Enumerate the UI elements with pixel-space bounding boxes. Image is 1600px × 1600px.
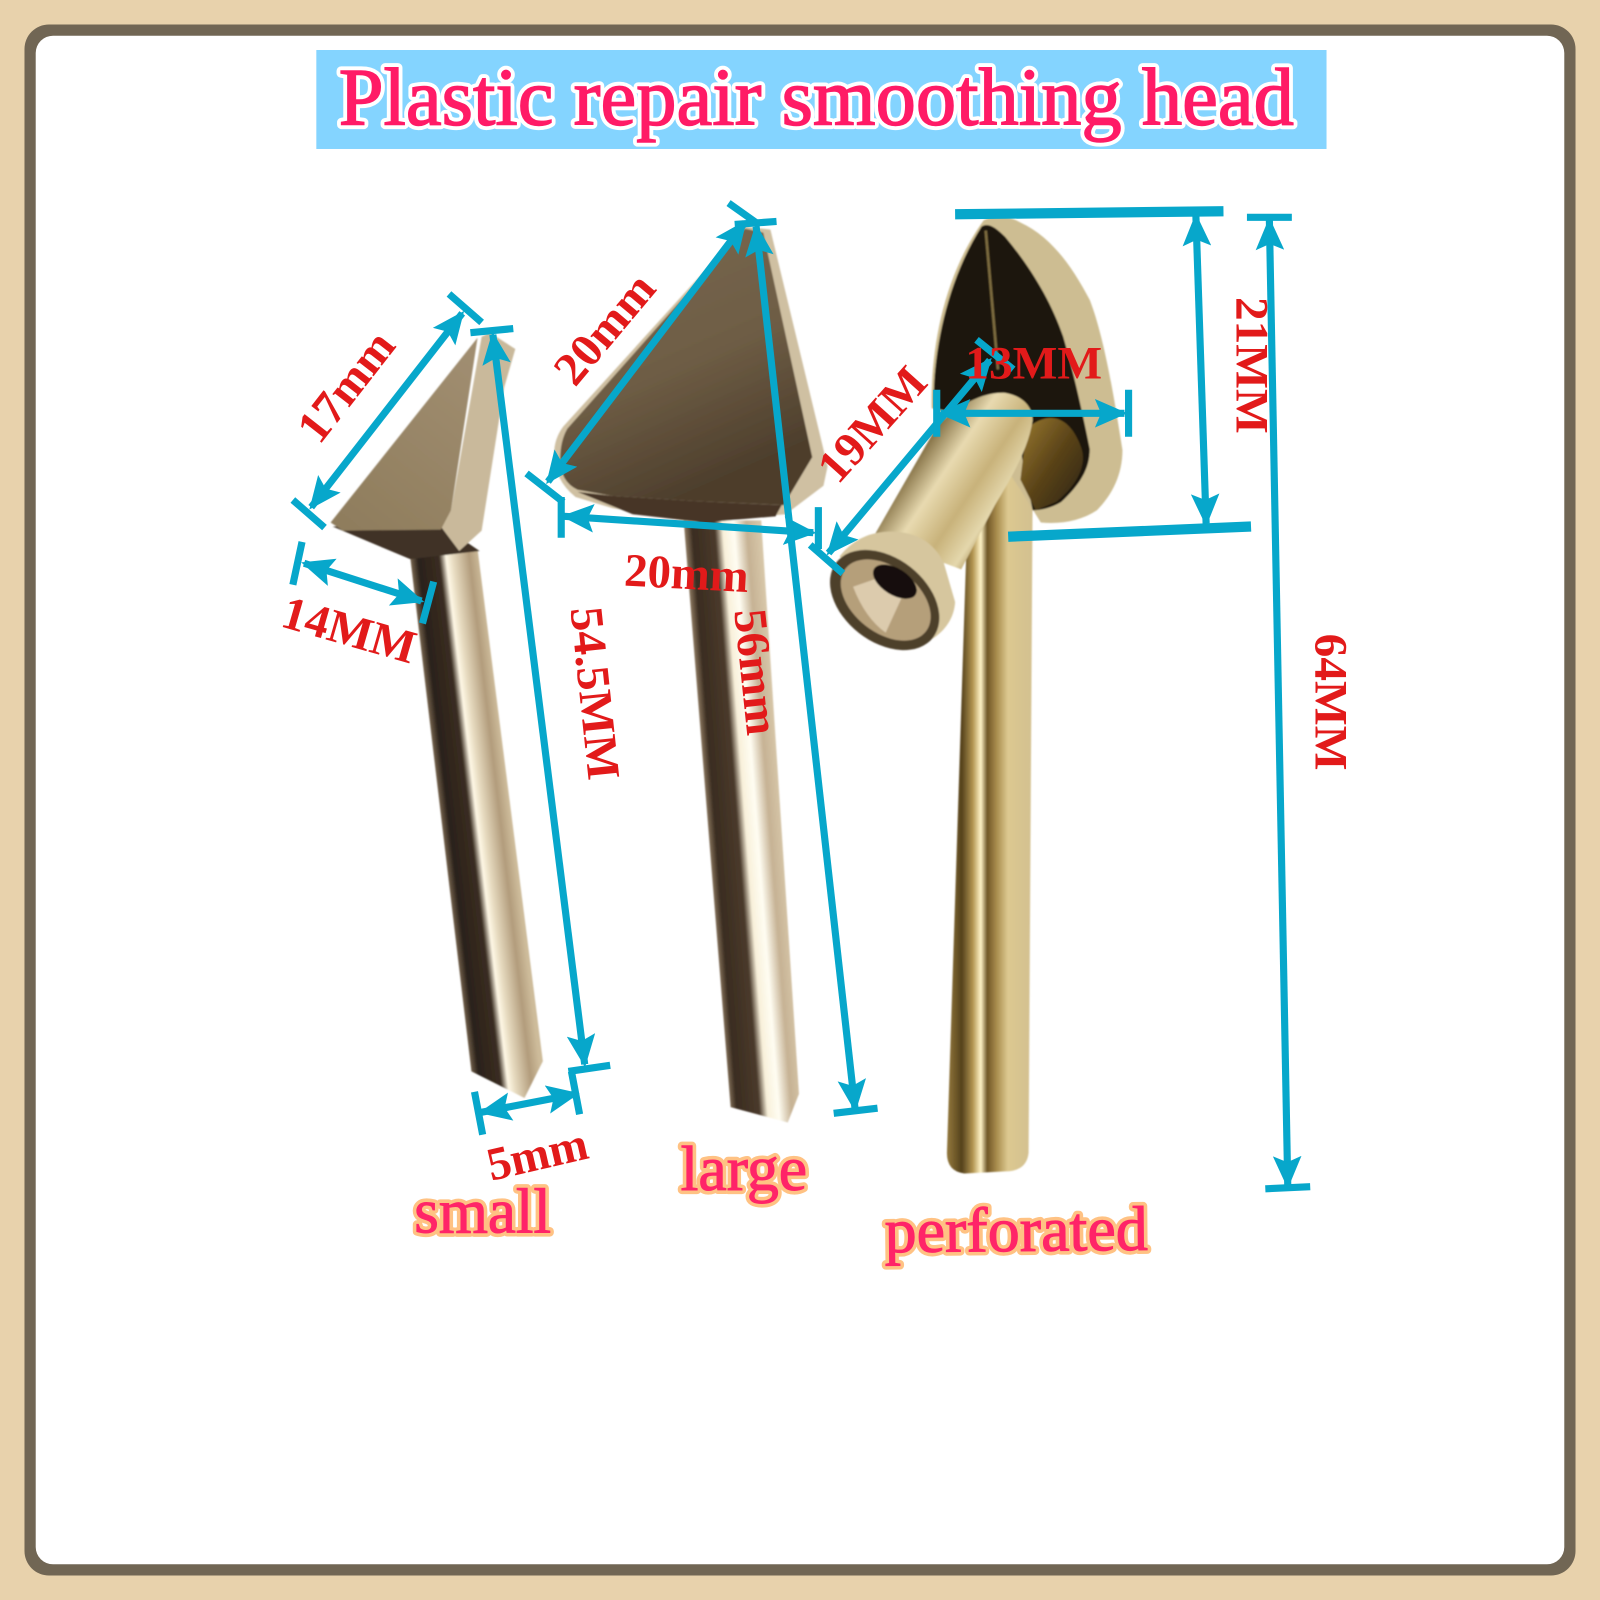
label diagonal 20mm: 20mm [544,263,666,395]
perforated opening [811,529,959,671]
dimension: small 5mm [474,1071,580,1135]
small smoothing head [331,333,543,1098]
large head rim [554,227,828,522]
label 56mm: 56mm [723,606,788,738]
perforated cone [825,543,946,657]
small head flat face [331,338,478,531]
small head underside [333,524,480,559]
perforated head rim [932,217,1122,523]
title banner: Plastic repair smoothing head [339,51,1294,142]
caption small: small [414,1177,551,1247]
large head flat face [560,229,812,505]
caption large: large [681,1134,807,1204]
large head lower shadow [578,492,782,522]
large smoothing head [554,227,828,1122]
dimension: perforated 13MM [937,390,1129,437]
dimension: large diagonal 20mm [527,203,760,502]
title banner: Plastic repair smoothing head [339,51,1294,142]
perforated smoothing head [811,217,1122,1173]
small head shaft [410,549,543,1098]
caption perforated: perforated [884,1194,1148,1266]
perforated cone highlight [853,578,902,633]
label 64MM: 64MM [1304,634,1356,770]
caption perforated: perforated [884,1194,1148,1266]
dimension: small 54.5MM [470,329,610,1071]
perforated hole [867,557,923,606]
label width 20mm: 20mm [623,545,750,603]
dimension: large 56mm [735,221,878,1113]
label 17mm: 17mm [287,321,406,453]
label 13MM: 13MM [965,338,1102,390]
label 21MM: 21MM [1226,297,1278,434]
dimension: small 17mm [293,294,482,528]
caption large: large [681,1134,807,1204]
label 5mm: 5mm [482,1118,593,1192]
dimension: perforated 19MM [810,340,1013,573]
perforated collar [840,532,955,643]
perforated head gold hollow [1020,418,1083,510]
small head side face [441,333,515,551]
perforated head ridge [986,231,998,369]
dimension: perforated 64MM [1247,217,1310,1189]
caption small: small [414,1177,551,1247]
dimension: perforated 21MM [955,211,1251,537]
perforated tube [873,393,1033,569]
label 54.5MM: 54.5MM [560,604,629,782]
dimension: large width 20mm [561,497,818,549]
label 19MM: 19MM [807,356,938,493]
label 14MM: 14MM [276,587,422,674]
perforated head dark face [934,225,1090,510]
perforated shaft [947,449,1033,1173]
dimension: small 14MM [293,542,434,623]
large head shaft [684,520,799,1122]
